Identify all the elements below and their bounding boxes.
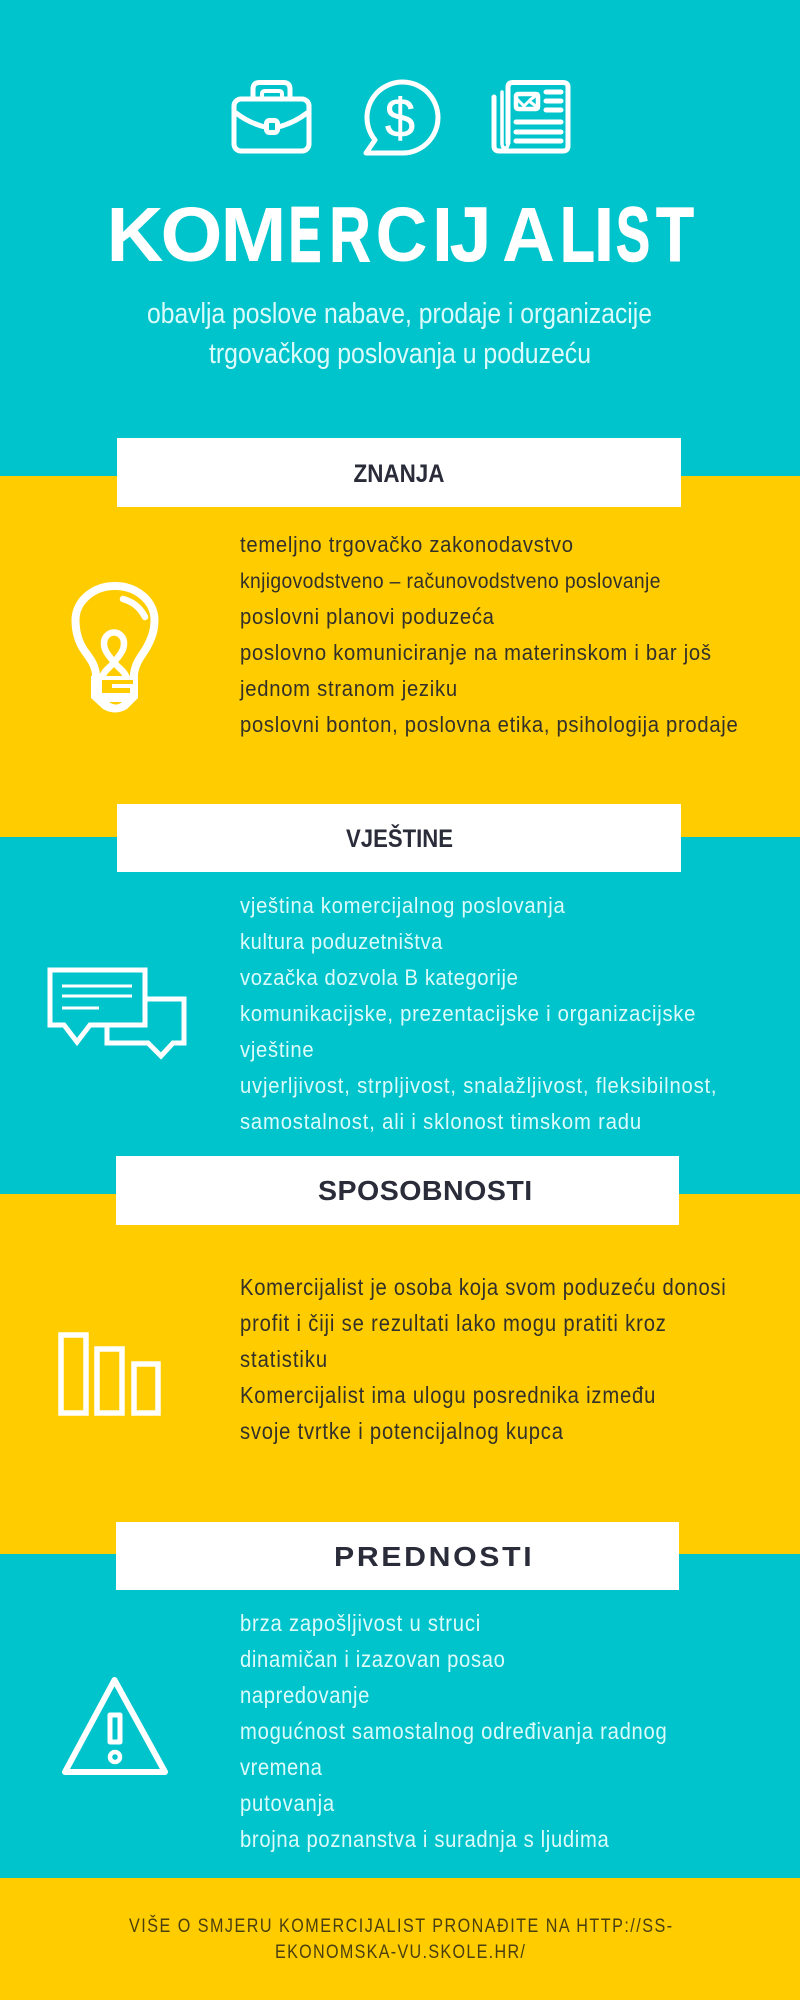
title: T	[656, 192, 694, 278]
panel: vjestine heading: VJEŠTINE	[346, 823, 453, 853]
icon: dollar speech bubble: $	[385, 87, 415, 149]
text block: znanja	[239, 533, 738, 737]
panel: sposobnosti background	[0, 1194, 800, 1554]
text block: prednosti: putovanja	[240, 1790, 335, 1816]
text block: vjestine: uvjerljivost, strpljivost, snalažljivost, fleksibilnost,	[240, 1074, 717, 1098]
title: I	[432, 192, 453, 278]
title: R	[330, 192, 370, 278]
text block: prednosti: vremena	[240, 1754, 323, 1780]
title: M	[220, 192, 286, 278]
text block: vjestine	[240, 894, 717, 1134]
title: J	[450, 192, 491, 278]
icon: newspaper	[494, 82, 568, 151]
panel: znanja heading	[117, 438, 681, 507]
text block: prednosti: brojna poznanstva i suradnja s ljudima	[240, 1826, 610, 1852]
text block: znanja: poslovni bonton, poslovna etika, psihologija prodaje	[240, 713, 738, 737]
icon: warning triangle	[65, 1680, 165, 1772]
text block: vjestine: komunikacijske, prezentacijske i organizacijske	[240, 1002, 695, 1026]
footer text: VIŠE O SMJERU KOMERCIJALIST PRONAĐITE NA HTTP://SS-	[129, 1914, 672, 1936]
text block: znanja: temeljno trgovačko zakonodavstvo	[240, 533, 573, 557]
panel: sposobnosti heading: SPOSOBNOSTI	[318, 1174, 532, 1206]
panel: prednosti background	[0, 1554, 800, 1878]
panel: footer background	[0, 1878, 800, 2000]
panel: znanja background	[0, 476, 800, 837]
subtitle: obavlja poslove nabave, prodaje i organizacije	[147, 298, 652, 330]
text block: vjestine: kultura poduzetništva	[240, 930, 443, 954]
icon: light bulb	[76, 586, 154, 712]
text block: znanja: jednom stranom jeziku	[239, 677, 457, 701]
title: E	[289, 192, 321, 278]
icon: dollar speech bubble	[366, 82, 438, 153]
text block: prednosti: mogućnost samostalnog određivanja radnog	[240, 1718, 667, 1744]
text block: vjestine: samostalnost, ali i sklonost timskom radu	[240, 1110, 641, 1134]
title: O	[160, 192, 222, 278]
text block: prednosti: brza zapošljivost u struci	[240, 1610, 480, 1636]
text block: sposobnosti: profit i čiji se rezultati lako mogu pratiti kroz	[240, 1310, 666, 1336]
title: A	[502, 192, 555, 278]
title: I	[593, 192, 615, 278]
text block: sposobnosti: Komercijalist je osoba koja svom poduzeću donosi	[240, 1274, 726, 1300]
title: K	[106, 192, 164, 278]
subtitle	[147, 298, 652, 370]
footer text	[129, 1914, 672, 1962]
icon: briefcase	[234, 82, 309, 151]
panel: znanja heading: ZNANJA	[354, 460, 444, 488]
panel: vjestine heading	[117, 804, 681, 872]
panel: header background	[0, 0, 800, 476]
text block: vjestine: vještine	[240, 1038, 314, 1062]
text block: sposobnosti: statistiku	[240, 1346, 327, 1372]
icon: bar chart	[61, 1335, 158, 1413]
text block: vjestine: vještina komercijalnog poslovanja	[240, 894, 565, 918]
subtitle: trgovačkog poslovanja u poduzeću	[209, 338, 591, 370]
panel: sposobnosti heading	[116, 1156, 679, 1225]
text block: vjestine: vozačka dozvola B kategorije	[240, 966, 518, 990]
text block: prednosti: dinamičan i izazovan posao	[240, 1646, 505, 1672]
panel: prednosti heading	[116, 1522, 679, 1590]
panel: prednosti heading: PREDNOSTI	[334, 1542, 532, 1573]
text block: znanja: poslovni planovi poduzeća	[240, 605, 494, 629]
title	[106, 192, 694, 278]
title: L	[560, 192, 594, 278]
text block: znanja: knjigovodstveno – računovodstveno poslovanje	[240, 570, 660, 593]
title: S	[616, 192, 650, 278]
text block: sposobnosti	[240, 1274, 726, 1444]
title: C	[376, 192, 428, 278]
text block: znanja: poslovno komuniciranje na materinskom i bar još	[240, 641, 711, 665]
text block: prednosti: napredovanje	[240, 1682, 369, 1708]
icon: chat bubbles	[50, 970, 184, 1056]
text block: prednosti	[240, 1610, 667, 1852]
text block: sposobnosti: svoje tvrtke i potencijalnog kupca	[240, 1418, 564, 1444]
panel: vjestine background	[0, 837, 800, 1194]
text block: sposobnosti: Komercijalist ima ulogu posrednika između	[240, 1382, 655, 1408]
footer text: EKONOMSKA-VU.SKOLE.HR/	[275, 1941, 525, 1962]
